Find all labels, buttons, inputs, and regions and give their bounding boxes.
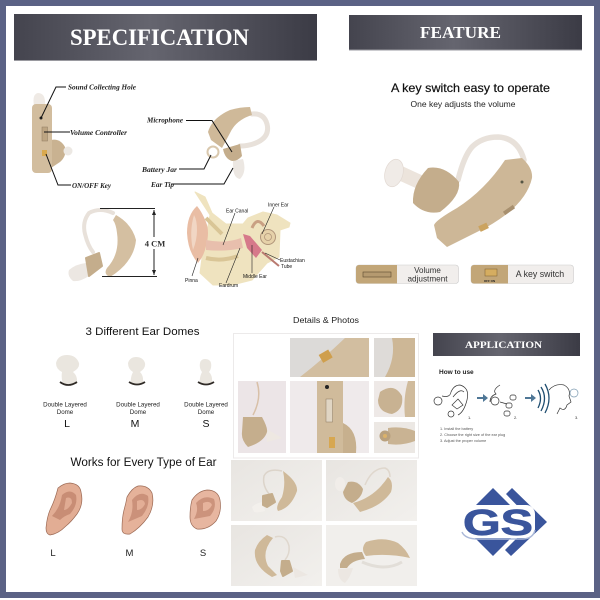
photo frame bbox=[234, 334, 418, 458]
dome M: M bbox=[131, 418, 139, 430]
hearing aid with dimension bbox=[68, 210, 136, 281]
ear anatomy labels: Eustachian bbox=[280, 258, 305, 264]
dome M: Dome bbox=[130, 409, 147, 416]
usage arrow one bbox=[477, 394, 488, 402]
photo: tube end bbox=[374, 422, 415, 453]
how to use title: How to use bbox=[439, 369, 474, 376]
feature subheading: One key adjusts the volume bbox=[410, 99, 516, 109]
specification labels left: Sound Collecting Hole bbox=[68, 84, 136, 92]
feature badge: volume adjustment bbox=[356, 265, 458, 284]
details heading: Details & Photos bbox=[293, 315, 359, 325]
usage step 2 diagram bbox=[490, 385, 517, 420]
ear types heading: Works for Every Type of Ear bbox=[70, 457, 217, 469]
specification callouts right bbox=[172, 120, 233, 184]
dome M: Double Layered bbox=[116, 402, 160, 408]
ear M bbox=[122, 486, 153, 559]
specification labels right: Ear Tip bbox=[150, 182, 175, 189]
usage instructions: 3. Adjust the proper volume bbox=[440, 439, 486, 443]
dimension marker 4 CM bbox=[100, 208, 167, 276]
ear anatomy labels: Middle Ear bbox=[243, 274, 267, 280]
ear M: M bbox=[126, 548, 134, 559]
usage step 3 diagram bbox=[538, 384, 578, 420]
usage step 1 diagram bbox=[434, 385, 471, 420]
photo: front closeup bbox=[290, 381, 369, 453]
usage step 1 diagram: 1. bbox=[468, 415, 471, 420]
specification labels left: Volume Controller bbox=[70, 130, 127, 137]
application header bbox=[433, 333, 580, 356]
dome L: Double Layered bbox=[43, 402, 87, 408]
usage arrow two bbox=[525, 394, 536, 402]
photo: switch closeup bbox=[290, 338, 369, 377]
ear anatomy labels: Ear Canal bbox=[226, 208, 248, 214]
feature badge: volume adjustment: Volume bbox=[414, 266, 441, 275]
specification callouts left bbox=[41, 87, 71, 185]
usage step 3 diagram: 3. bbox=[575, 415, 578, 420]
hearing aid side view bbox=[208, 107, 268, 179]
dimension marker 4 CM: 4 CM bbox=[145, 238, 165, 248]
dome S: S bbox=[202, 418, 210, 430]
dome L: L bbox=[64, 418, 70, 430]
specification labels left bbox=[68, 84, 136, 190]
feature badge: volume adjustment: adjustment bbox=[407, 274, 448, 284]
feature badge: key switch: A key switch bbox=[516, 269, 564, 279]
ear S: S bbox=[200, 548, 206, 559]
ear anatomy labels: Tube bbox=[281, 264, 292, 270]
usage step 2 diagram: 2. bbox=[514, 415, 517, 420]
ear anatomy diagram bbox=[185, 192, 305, 289]
ear anatomy labels: Eardrum bbox=[219, 283, 238, 289]
usage instructions: 1. Install the battery bbox=[440, 427, 473, 431]
ear anatomy labels: Inner Ear bbox=[268, 202, 289, 208]
feature heading: A key switch easy to operate bbox=[391, 81, 550, 95]
photo: large view three bbox=[231, 525, 322, 586]
photo: large view two bbox=[326, 460, 417, 521]
ear L bbox=[46, 483, 82, 559]
photo: large view four bbox=[326, 525, 417, 586]
dome S: Double Layered bbox=[184, 402, 228, 408]
specification header bbox=[14, 14, 317, 61]
usage instructions: 2. Choose the right size of the ear plug bbox=[440, 433, 505, 437]
application header: APPLICATION bbox=[465, 341, 542, 351]
dome L: Dome bbox=[57, 409, 74, 416]
ear L: L bbox=[50, 548, 56, 559]
specification labels left: ON/OFF Key bbox=[72, 183, 112, 190]
specification labels right: Battery Jar bbox=[141, 167, 177, 174]
dome S bbox=[184, 359, 228, 430]
photo: rear closeup bbox=[374, 381, 415, 417]
usage instructions bbox=[440, 427, 505, 443]
ear anatomy labels bbox=[185, 202, 305, 289]
GS logo: GS bbox=[463, 502, 533, 543]
ear domes heading: 3 Different Ear Domes bbox=[86, 326, 200, 338]
large hearing aid bbox=[382, 137, 532, 247]
ear anatomy labels: Pinna bbox=[185, 278, 198, 284]
feature badge: key switch bbox=[471, 265, 574, 284]
feature header bbox=[349, 15, 582, 50]
GS logo bbox=[457, 488, 547, 556]
specification labels right: Microphone bbox=[146, 118, 183, 124]
dome S: Dome bbox=[198, 409, 215, 416]
feature header: FEATURE bbox=[420, 23, 501, 42]
specification header: SPECIFICATION bbox=[70, 25, 249, 50]
hearing aid front view bbox=[32, 93, 72, 173]
dome L bbox=[43, 355, 87, 430]
specification labels right bbox=[141, 118, 183, 189]
photo: large view one bbox=[231, 460, 322, 521]
ear anatomy leader lines bbox=[192, 207, 280, 283]
photo: hook side bbox=[238, 381, 286, 453]
ear S bbox=[190, 490, 220, 559]
photo: edge closeup bbox=[374, 338, 415, 377]
feature badge: key switch: OFF ON bbox=[484, 279, 495, 283]
dome M bbox=[116, 357, 160, 430]
